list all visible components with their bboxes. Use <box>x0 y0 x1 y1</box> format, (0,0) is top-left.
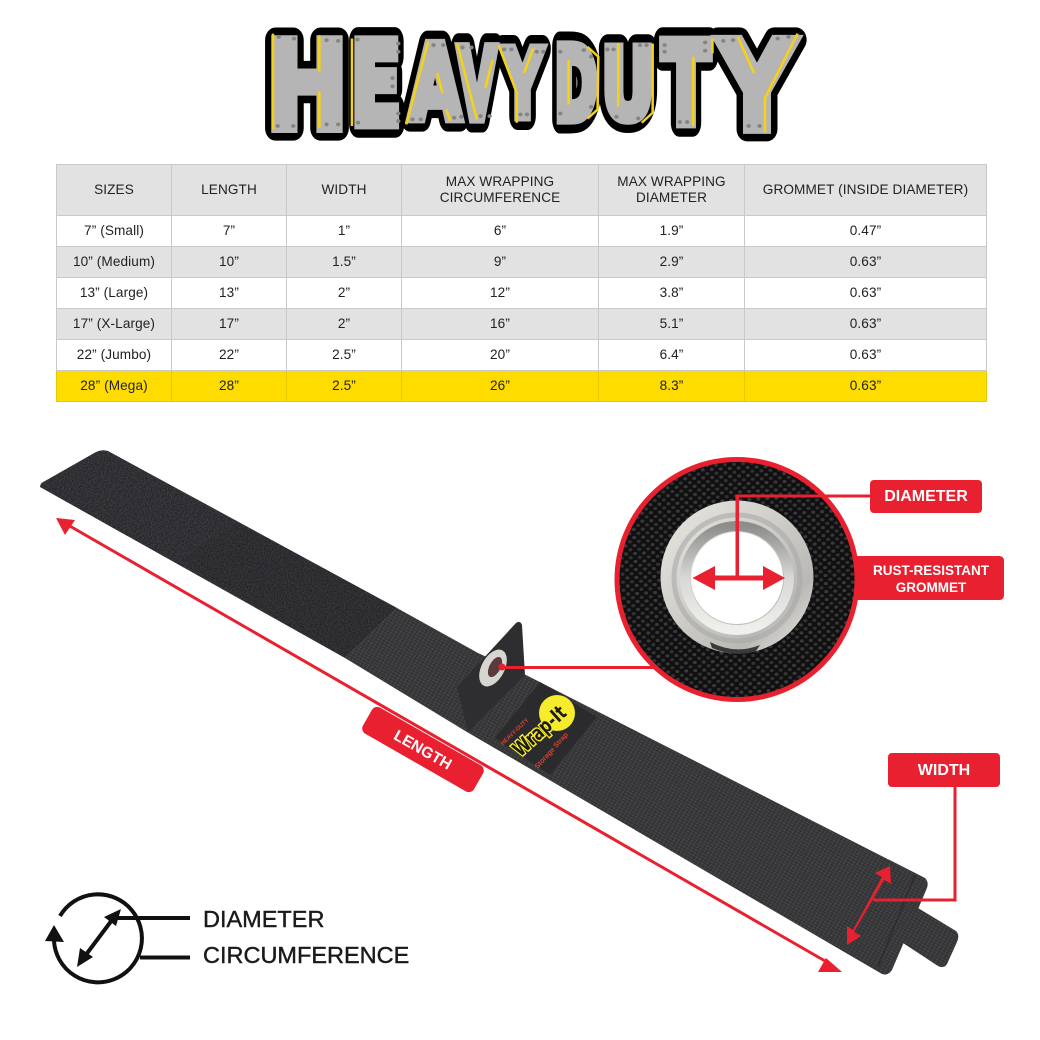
size table: 0.63” <box>850 254 881 269</box>
label: rust-resistant grommet badge: GROMMET <box>896 580 967 595</box>
size table: 10” <box>219 254 239 269</box>
label: width badge: WIDTH <box>918 762 970 779</box>
size table: 13” <box>219 285 239 300</box>
logo outline layer: H <box>266 17 348 157</box>
size table: 17” <box>219 316 239 331</box>
logo steel face layer: U <box>602 30 654 142</box>
strap webbing body <box>345 608 928 974</box>
velcro overlap shading <box>180 523 397 658</box>
size table: 9” <box>494 254 506 269</box>
logo steel face layer: V <box>458 29 496 141</box>
legend: diameter and circumference <box>45 894 409 982</box>
legend circle icon <box>54 894 190 982</box>
size table: 2.9” <box>660 254 683 269</box>
brand wordmark: Wrap-It <box>508 700 571 761</box>
label: length badge: LENGTH <box>391 727 454 774</box>
label: diameter badge: DIAMETER <box>884 488 968 505</box>
lens inner bevel <box>685 526 789 630</box>
size table: DIAMETER <box>636 190 707 205</box>
logo outline layer: E <box>351 18 401 151</box>
size table: 13” (Large) <box>80 285 148 300</box>
size table: 0.63” <box>850 378 881 393</box>
size table: 22” (Jumbo) <box>77 347 151 362</box>
logo outline layer: D <box>555 26 597 143</box>
size table: 28” (Mega) <box>80 378 148 393</box>
size table: 6.4” <box>660 347 683 362</box>
logo rivets <box>276 35 791 128</box>
arrow: length <box>56 518 842 972</box>
callout: diameter measure on grommet <box>692 480 982 590</box>
legend text: DIAMETER <box>203 906 324 932</box>
size table: 2.5” <box>332 378 356 393</box>
logo steel face layer: Y <box>717 15 796 158</box>
size table: 20” <box>490 347 510 362</box>
logo steel face layer: D <box>555 26 597 143</box>
size table: 1” <box>338 223 350 238</box>
brand top line: HEAVY-DUTY <box>500 718 530 747</box>
label: rust-resistant grommet badge: RUST-RESISTANT <box>873 563 990 578</box>
lens inner ring <box>674 515 800 641</box>
size table: WIDTH <box>321 182 367 197</box>
size table: 26” <box>490 378 510 393</box>
size table: 5.1” <box>660 316 683 331</box>
size table: 1.5” <box>332 254 356 269</box>
size table <box>56 164 987 402</box>
lens metal ring <box>660 500 814 654</box>
label: rust-resistant grommet badge <box>857 556 1004 600</box>
brand bottom line: Storage Strap <box>534 732 570 770</box>
logo outline layer: V <box>458 29 496 141</box>
size table: 2” <box>338 316 350 331</box>
logo outline layer <box>266 15 796 158</box>
size table: 6” <box>494 223 506 238</box>
strap tail <box>903 908 958 967</box>
size table: 22” <box>219 347 239 362</box>
woven label patch <box>495 682 597 775</box>
lens ring reflection <box>710 642 760 654</box>
size table: 16” <box>490 316 510 331</box>
lens red border <box>617 460 857 700</box>
size table: 12” <box>490 285 510 300</box>
lens hole <box>691 532 783 624</box>
logo outline layer: Y <box>502 31 543 138</box>
size table: 2” <box>338 285 350 300</box>
logo steel face layer: Y <box>502 31 543 138</box>
size table: 0.63” <box>850 347 881 362</box>
size table: 28” <box>219 378 239 393</box>
size table: 7” <box>223 223 235 238</box>
size table: CIRCUMFERENCE <box>440 190 560 205</box>
logo outline layer: Y <box>717 15 796 158</box>
legend text <box>203 906 409 968</box>
logo steel face layer: A <box>409 26 461 143</box>
logo steel face layer <box>266 15 796 158</box>
lens fabric <box>617 460 857 700</box>
size table: 1.9” <box>660 223 683 238</box>
size table: 7” (Small) <box>84 223 144 238</box>
label: length badge <box>360 705 486 794</box>
strap product illustration <box>40 450 958 974</box>
size table: MAX WRAPPING <box>446 174 554 189</box>
strap end seam <box>878 875 915 967</box>
logo outline layer: A <box>409 26 461 143</box>
size table: GROMMET (INSIDE DIAMETER) <box>763 182 968 197</box>
size table: 10” (Medium) <box>73 254 155 269</box>
tab grommet <box>473 645 513 691</box>
logo outline layer: T <box>662 20 710 151</box>
strap velcro section <box>40 450 397 658</box>
logo steel face layer: T <box>662 20 710 151</box>
logo steel face layer: E <box>351 18 401 151</box>
logo yellow edge highlights <box>273 34 798 133</box>
size table: 3.8” <box>660 285 683 300</box>
logo steel face layer: H <box>266 17 348 157</box>
size table: SIZES <box>94 182 134 197</box>
size table: 2.5” <box>332 347 356 362</box>
size table: 0.63” <box>850 285 881 300</box>
size table: 0.63” <box>850 316 881 331</box>
size table: 0.47” <box>850 223 881 238</box>
size table: 17” (X-Large) <box>73 316 155 331</box>
callout: width measure <box>847 753 1000 945</box>
label: diameter badge <box>870 480 982 513</box>
grommet tab fold <box>457 622 525 732</box>
callout: grommet pointer line <box>498 664 658 670</box>
legend text: CIRCUMFERENCE <box>203 942 409 968</box>
size table: 8.3” <box>660 378 683 393</box>
brand logo on label <box>500 695 575 770</box>
brand yellow disc <box>539 695 575 731</box>
title: Heavy Duty logo <box>266 15 798 158</box>
legend arrowheads <box>45 909 121 967</box>
logo outline layer: U <box>602 30 654 142</box>
label: width badge <box>888 753 1000 787</box>
grommet close-up lens <box>617 460 857 700</box>
size table: LENGTH <box>201 182 257 197</box>
size table: MAX WRAPPING <box>617 174 726 189</box>
